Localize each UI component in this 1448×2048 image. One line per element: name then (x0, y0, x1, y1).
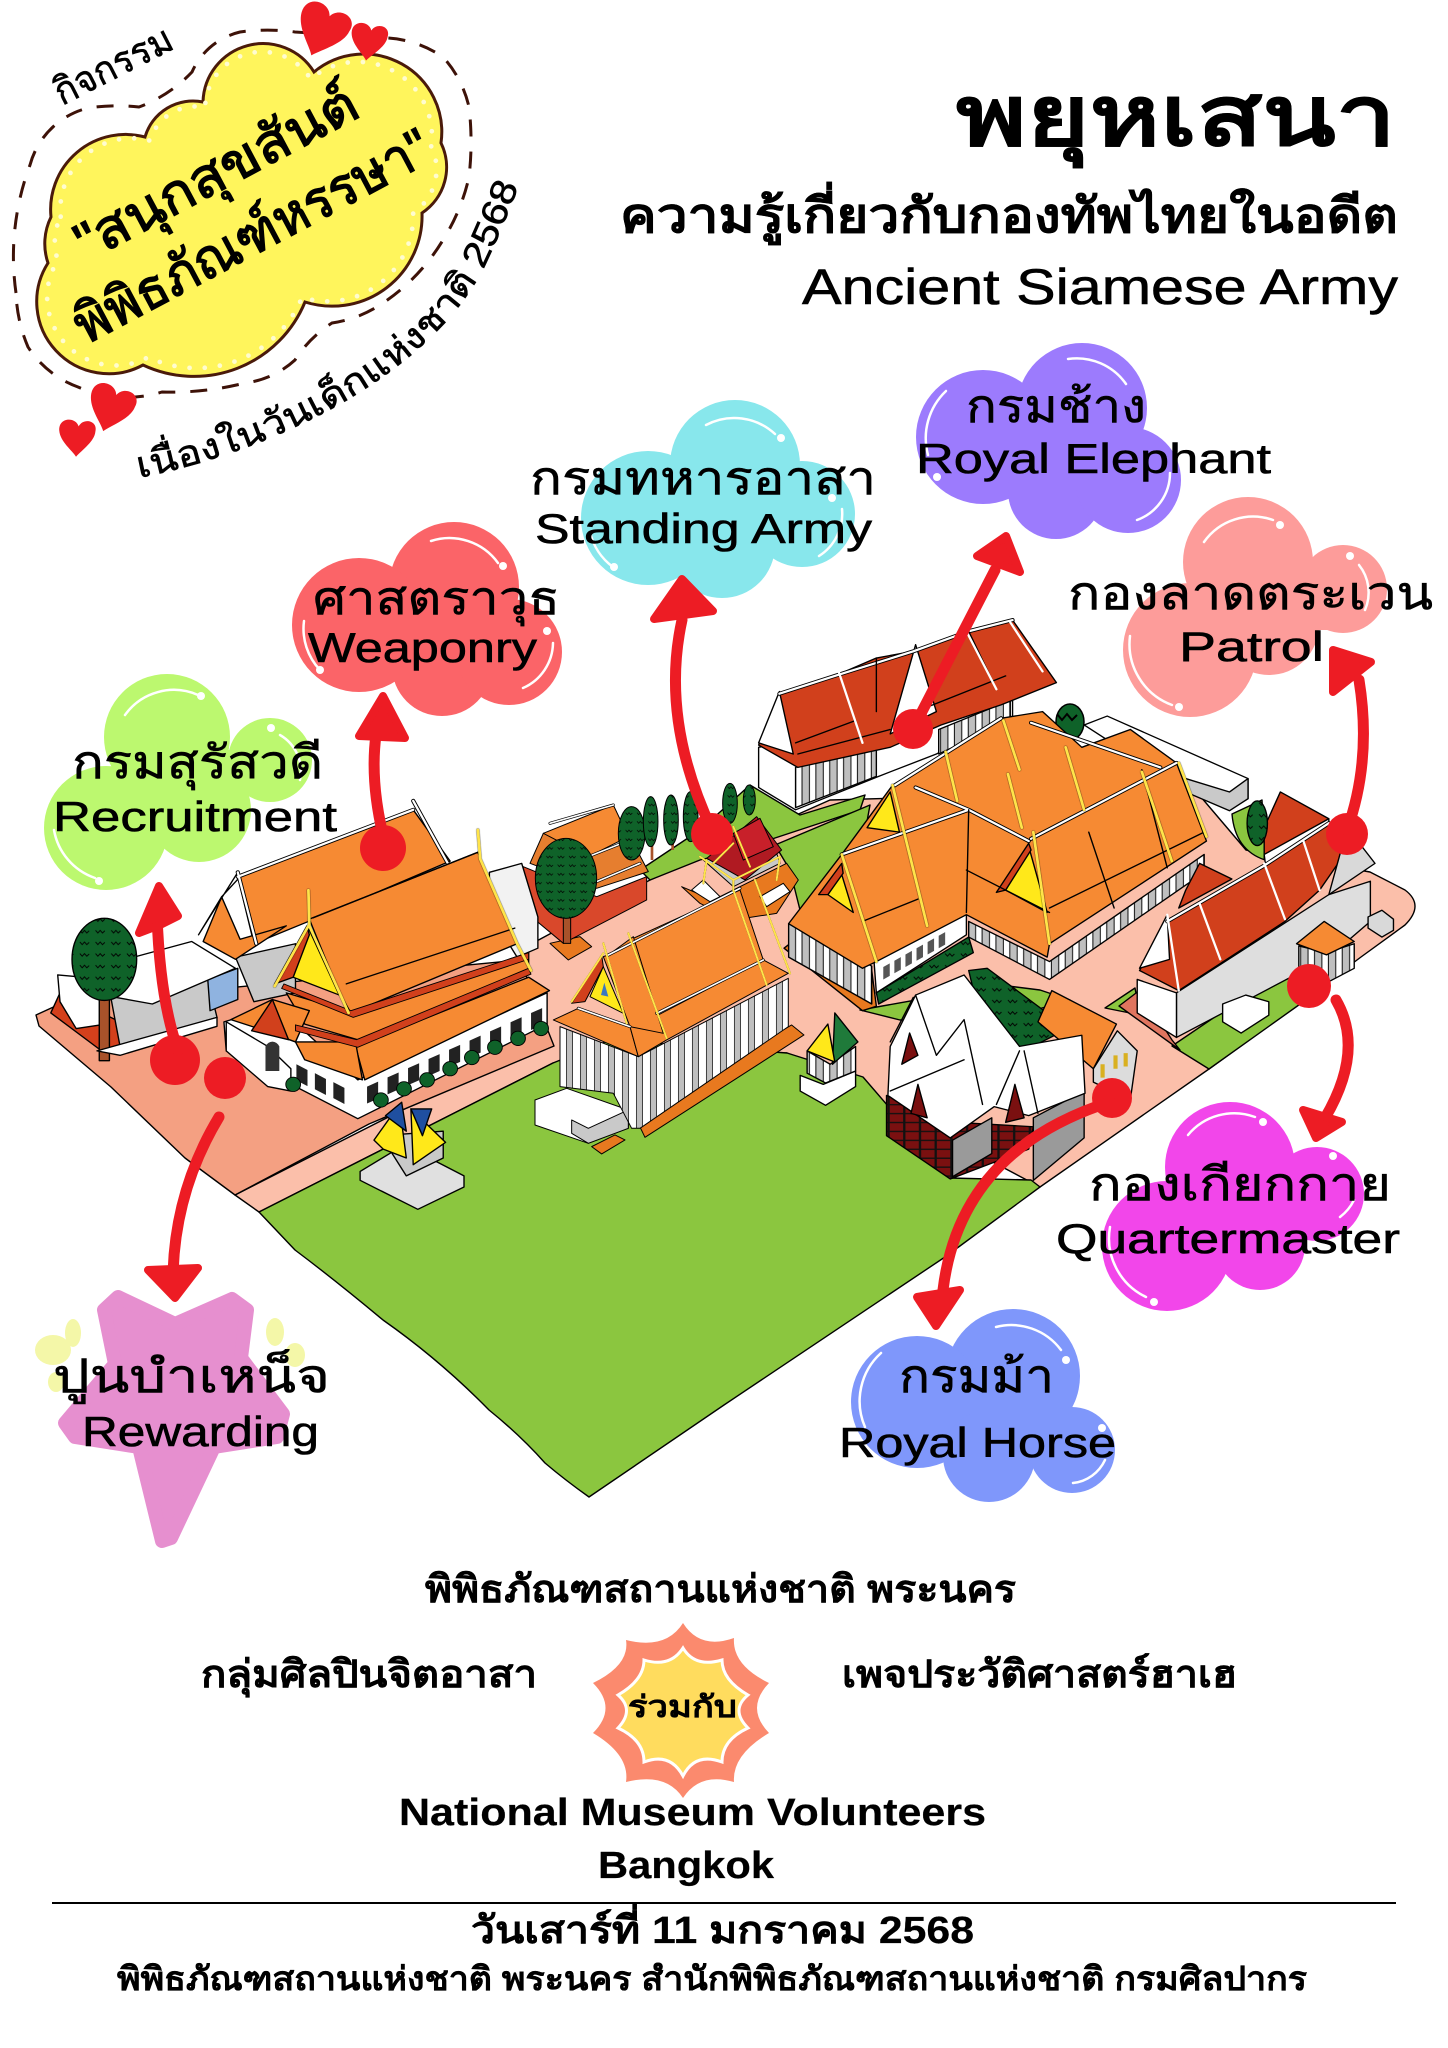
shrine body (381, 1131, 443, 1176)
roof lines (313, 852, 515, 984)
gable red (572, 955, 603, 1003)
arrow: to quartermaster (1287, 964, 1348, 1138)
cloud (44, 674, 312, 890)
building: small shrine (800, 1013, 858, 1105)
front gable yellow (1006, 850, 1047, 912)
porch gable (252, 1000, 289, 1040)
dark gable left (902, 1033, 918, 1064)
white gable (759, 692, 793, 754)
white gable (1140, 915, 1170, 968)
cloud (1123, 497, 1387, 717)
building: back red hall (759, 620, 1056, 810)
gloss (1109, 1113, 1354, 1306)
footer: พิพิธภัณฑสถานแห่งชาติ พระนคร สำนักพิพิธภัณฑสถานแห่งชาติ กรมศิลปากร (117, 1960, 1307, 1997)
colonnade right (939, 700, 1010, 754)
back green tree (1247, 801, 1267, 846)
blue niche (601, 983, 608, 997)
red band (295, 968, 531, 1047)
lower roof (203, 897, 286, 959)
base (800, 1071, 856, 1105)
gray wall (111, 979, 217, 1046)
back gable yellow (867, 792, 899, 832)
gable (890, 645, 936, 734)
panel: activity badge (12, 2, 516, 478)
dark green hedge behind (969, 968, 1068, 1051)
windows left (296, 1064, 344, 1104)
cloud (581, 400, 855, 598)
roof (238, 810, 450, 944)
arrow: to standing army (654, 579, 733, 855)
tree crown (535, 838, 597, 918)
english label: Royal Elephant (916, 435, 1271, 482)
english label: Standing Army (535, 505, 872, 552)
dark gable center (911, 1084, 927, 1118)
white roofs (888, 975, 1085, 1138)
trunk (99, 993, 109, 1061)
yellow trims (842, 721, 1206, 962)
folds (1167, 841, 1320, 991)
roofs (543, 805, 628, 857)
lawn right small (1105, 988, 1140, 1015)
ridge (1167, 823, 1329, 921)
colonnade right (969, 854, 1204, 979)
creases (863, 770, 1204, 921)
panel: royal elephant (916, 343, 1271, 539)
cloud (851, 1309, 1115, 1502)
arrow: to recruitment (139, 886, 200, 1085)
left pillars base (784, 930, 876, 1011)
back small red hall (1264, 792, 1329, 859)
panel: rewarding (35, 1297, 330, 1541)
lawn right (1172, 966, 1303, 1069)
english label: Royal Horse (839, 1419, 1116, 1466)
roof lines (796, 631, 1006, 754)
volunteers line: National Museum Volunteers (399, 1792, 986, 1834)
thai label: กรมสุรัสวดี (72, 736, 323, 791)
subtitle thai: ความรู้เกี่ยวกับกองทัพไทยในอดีต (620, 181, 1398, 246)
red roof (759, 620, 1056, 767)
potted plants (286, 1021, 548, 1107)
roof silhouette (789, 712, 1206, 968)
back white annex (1084, 716, 1248, 810)
building: left white block and tree (51, 918, 238, 1061)
arrow: to patrol (1326, 650, 1371, 855)
gloss (590, 418, 842, 571)
heart top large (287, 0, 355, 66)
door porch (226, 1022, 291, 1091)
red band upper (282, 953, 529, 1017)
cloud (292, 522, 562, 716)
map: museum grounds (36, 620, 1415, 1497)
lawn back (640, 785, 865, 880)
panel: patrol (1068, 497, 1433, 717)
orange roof (1038, 991, 1116, 1069)
arrow: to royal horse (917, 1078, 1132, 1326)
building: big hall (784, 712, 1248, 1011)
yellow cloud (37, 44, 447, 376)
ridge lines (550, 805, 640, 882)
ridge (238, 801, 448, 944)
building: blue shrine (360, 1102, 464, 1209)
shed (1223, 995, 1269, 1033)
lawn (259, 1040, 1040, 1497)
lawn middle (775, 805, 870, 910)
building: back left hall (199, 801, 538, 1002)
badge text: ร่วมกับ (628, 1691, 737, 1724)
arrow: to weaponry (359, 696, 406, 871)
gable red (275, 926, 309, 984)
ridge (779, 620, 1013, 694)
roof (707, 817, 782, 880)
small red side roof (1179, 863, 1232, 908)
slab front (592, 1135, 625, 1154)
building: main left hall (224, 830, 549, 1119)
white wing (874, 912, 966, 993)
left pillars (789, 924, 872, 1004)
wing wall (235, 944, 295, 1002)
english label: Recruitment (53, 793, 337, 840)
thai label: กรมทหารอาสา (530, 452, 876, 504)
lower roof right (356, 977, 549, 1080)
gold trims (275, 830, 531, 1013)
heart bottom large (80, 379, 139, 439)
panel: recruitment (44, 674, 337, 890)
white gable (199, 872, 240, 935)
columns (560, 978, 788, 1128)
ridges (578, 888, 763, 1027)
lower roof right (630, 960, 788, 1057)
roof (832, 1013, 858, 1064)
gloss (304, 538, 553, 688)
upper roof (733, 818, 773, 860)
dark salmon strip (1119, 990, 1180, 1050)
outer burst (593, 1623, 769, 1798)
white rear (489, 863, 538, 957)
roof blue (386, 1102, 432, 1136)
panel: royal horse (839, 1309, 1116, 1502)
left slope (603, 937, 663, 1033)
dashed outline around badge (13, 30, 471, 397)
thai label: กองเกียกกาย (1089, 1158, 1391, 1210)
walls dark red (887, 1096, 1033, 1179)
wall (224, 993, 547, 1119)
arrow: to rewarding (148, 1057, 246, 1298)
gloss (926, 358, 1170, 520)
base (550, 937, 592, 960)
cloud (916, 343, 1181, 539)
dark gable right (1006, 1084, 1024, 1122)
label: activity: กิจกรรม (47, 18, 180, 114)
gray end house (1093, 1031, 1137, 1100)
step (97, 1017, 217, 1055)
gable yellow (590, 967, 623, 1013)
thai label: ปูนบำเหน็จ (53, 1349, 330, 1404)
mid roof (286, 953, 529, 1040)
ridges (842, 718, 1176, 854)
tree trunk (563, 913, 571, 943)
arrow: to royal elephant (893, 536, 1020, 749)
date: วันเสาร์ที่ 11 มกราคม 2568 (471, 1903, 974, 1952)
gray wall (1176, 881, 1370, 1037)
fold lines (890, 995, 1038, 1113)
windows on wing (883, 932, 945, 979)
inner burst (618, 1648, 748, 1776)
panel: standing army (530, 400, 876, 598)
english label: Patrol (1179, 623, 1324, 670)
glass right (1033, 1091, 1084, 1180)
wall (759, 689, 1013, 810)
roof (1140, 823, 1347, 991)
english label: Rewarding (82, 1408, 319, 1455)
white roof (115, 941, 235, 1004)
front roof (553, 1008, 638, 1057)
panel: weaponry (292, 522, 562, 716)
front hedge (876, 937, 973, 1004)
small porch roof (231, 1000, 309, 1042)
gable yellow (293, 928, 339, 995)
thai label: กรมม้า (899, 1350, 1054, 1402)
main roof (630, 890, 763, 1017)
base plinth (682, 863, 798, 920)
small pavilion (1299, 944, 1354, 982)
lawn near walkway (860, 985, 1070, 1020)
gloss (860, 1325, 1106, 1483)
building: red pavilion (682, 817, 798, 920)
base slab (635, 1025, 804, 1137)
subtitle english: Ancient Siamese Army (802, 259, 1398, 315)
body (703, 843, 780, 887)
gold trims (572, 880, 790, 1038)
blue panel (208, 968, 238, 1011)
front gable red (996, 843, 1031, 892)
thai label: กรมช้าง (966, 380, 1146, 432)
trims (700, 827, 780, 897)
roof yellow (374, 1104, 446, 1165)
left gable red (819, 863, 843, 895)
tree: behind big hall (1056, 704, 1084, 740)
organizer heading: พิพิธภัณฑสถานแห่งชาติ พระนคร (425, 1569, 1017, 1611)
building: white hall (876, 937, 1137, 1180)
dotted trim (47, 52, 437, 368)
statue base (535, 1088, 628, 1143)
left box (58, 975, 108, 1029)
english label: Weaponry (308, 624, 537, 671)
crate (1368, 910, 1393, 937)
gable (807, 1024, 835, 1062)
lower roof left (295, 1042, 362, 1080)
glass windows (953, 1118, 992, 1177)
star (65, 1297, 283, 1541)
gray gable (1329, 828, 1375, 895)
pavilion roof (1297, 921, 1354, 955)
curved caption: เนื่องในวันเด็กแห่งชาติ 2568 (138, 180, 516, 478)
badge title line 2: พิพิธภัณฑ์หรรษา" (63, 117, 440, 356)
thai label: กองลาดตระเวน (1068, 567, 1433, 619)
building: right long red hall (1137, 792, 1393, 1037)
gloss (54, 690, 301, 885)
upper roof (309, 852, 517, 1013)
english label: Quartermaster (1056, 1215, 1400, 1262)
red wall (523, 867, 647, 943)
gloss (1130, 517, 1369, 711)
stepped base (360, 1149, 464, 1209)
organizer right: เพจประวัติศาสตร์ฮาเฮ (842, 1653, 1237, 1696)
sparkles (35, 1318, 305, 1392)
windows (367, 1008, 542, 1104)
panel: quartermaster (1056, 1102, 1400, 1311)
title: พยุหเสนา (956, 69, 1396, 169)
building: stilt house and tree (523, 783, 755, 960)
left gable yellow (828, 875, 853, 912)
row of trees (618, 783, 755, 860)
badge title line 1: "สนุกสุขสันต์ (64, 73, 370, 275)
thai label: ศาสตราวุธ (313, 572, 560, 627)
heart bottom small (57, 419, 96, 458)
bangkok: Bangkok (598, 1845, 775, 1887)
body (807, 1046, 856, 1083)
organizer left: กลุ่มศิลปินจิตอาสา (201, 1654, 537, 1698)
heart top small (347, 21, 389, 63)
ground: pale paths (235, 790, 1415, 1212)
lawn right back (1232, 800, 1265, 860)
building: central hall (535, 880, 804, 1154)
dark red mat (51, 993, 148, 1051)
cloud (1102, 1102, 1364, 1311)
statue base gray side (572, 1110, 628, 1143)
colonnade (796, 745, 876, 808)
crown (72, 918, 137, 1000)
ground: left plaza (36, 960, 554, 1195)
burst badge (593, 1623, 769, 1798)
stairs (692, 880, 790, 907)
white end (1137, 979, 1176, 1037)
